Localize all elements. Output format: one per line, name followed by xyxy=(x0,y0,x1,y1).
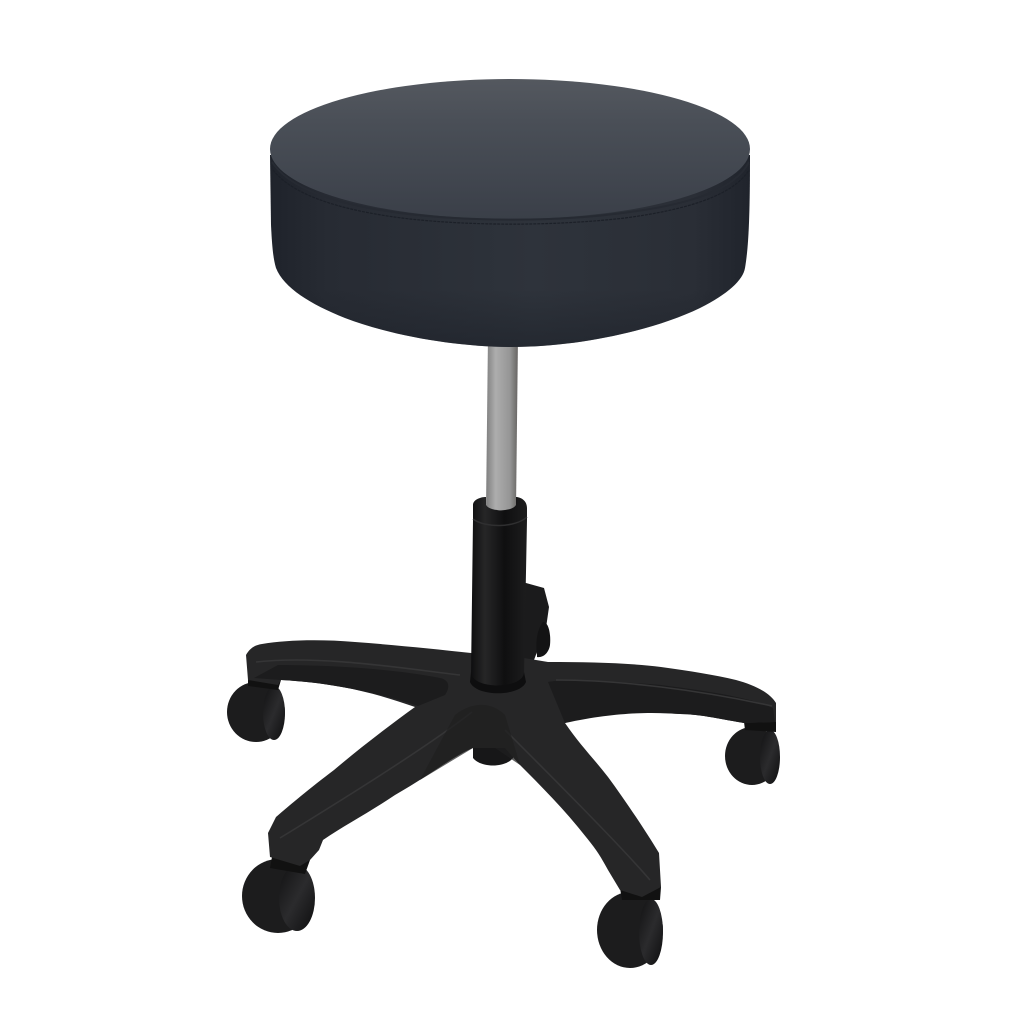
back base arm xyxy=(515,583,550,670)
black cylinder housing xyxy=(470,497,527,693)
seat piping and stitching xyxy=(272,162,749,220)
base arm edge highlights xyxy=(256,660,772,880)
five-star base xyxy=(246,640,776,897)
centre stem under base xyxy=(473,735,513,766)
lower casters xyxy=(227,680,780,968)
front-left caster xyxy=(242,857,315,933)
back caster xyxy=(536,622,550,657)
seat top xyxy=(270,79,750,219)
right caster xyxy=(725,720,780,785)
base arm recesses xyxy=(254,665,448,706)
chrome gas lift pole xyxy=(486,335,518,510)
front-right caster xyxy=(597,887,663,968)
seat cushion xyxy=(270,79,750,347)
seat side xyxy=(270,155,750,347)
left caster xyxy=(227,680,285,742)
base collar xyxy=(470,672,526,693)
hub highlight xyxy=(420,705,520,780)
